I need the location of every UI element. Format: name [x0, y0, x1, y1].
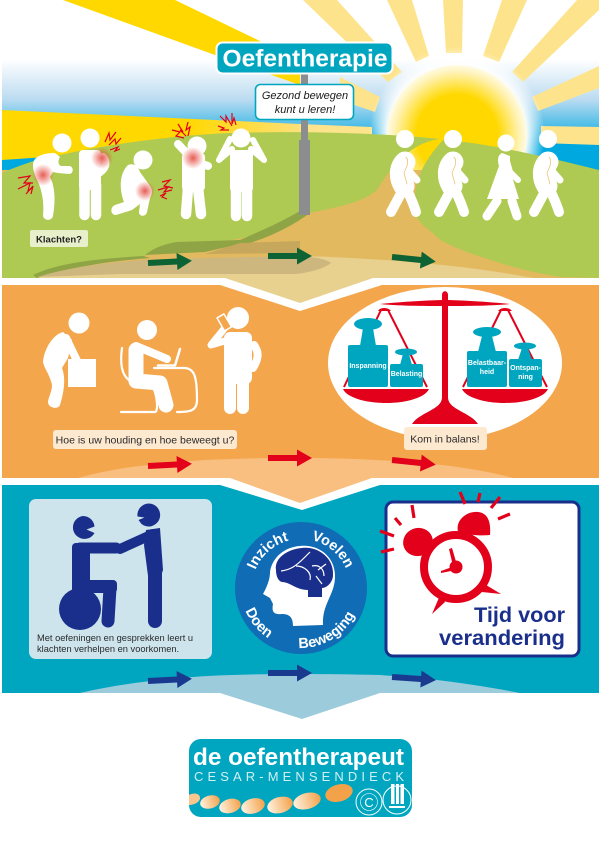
- figures with complaints: [18, 113, 264, 220]
- walking figures: [391, 130, 560, 216]
- walker 2: [439, 130, 465, 212]
- pale ground: [33, 257, 533, 278]
- heading: verandering: [439, 627, 565, 650]
- arrows: green: [148, 248, 437, 271]
- weight: Belastbaarheid: Belastbaar-: [468, 360, 507, 367]
- logo ovals: [189, 781, 355, 816]
- sign text: kunt u leren!: [275, 104, 335, 116]
- figure: lifting a box: [43, 312, 96, 408]
- large yellow ray top left: [63, 0, 300, 85]
- road base: [2, 170, 599, 278]
- caption: klachten verhelpen en voorkomen.: [37, 644, 179, 654]
- caption: balance: [404, 427, 487, 450]
- figure: sitting at a laptop: [121, 320, 197, 412]
- left hill: [2, 132, 440, 278]
- head silhouette: [263, 546, 335, 626]
- figure: shoulder pain: [79, 128, 113, 215]
- caption: Met oefeningen en gesprekken leert u: [37, 633, 193, 643]
- arrows: blue: [148, 664, 436, 689]
- title: Oefentherapie: [222, 46, 388, 72]
- sun: [369, 47, 545, 223]
- panel: exercises and talks: [29, 499, 212, 659]
- walker 4: [534, 130, 560, 212]
- panel: time for change: [380, 492, 579, 656]
- figure: chest pain: [178, 136, 208, 214]
- yellow band left: [2, 110, 300, 160]
- weight: Inspanning: Inspanning: [349, 363, 387, 370]
- figure: on the phone: [211, 307, 258, 408]
- panel: section 2 orange: [2, 285, 599, 478]
- alarm clock: [380, 492, 510, 614]
- circle: head with brain: [235, 522, 367, 654]
- weight: Ontspanning: [509, 342, 542, 387]
- weight: Inspanning: [348, 318, 388, 387]
- caption: balance: Kom in balans!: [410, 434, 480, 446]
- balance illustration: [328, 287, 562, 439]
- brain: [276, 548, 333, 597]
- logo: CESAR-MENSENDIECK: [194, 769, 404, 784]
- seal: C: C: [364, 795, 374, 810]
- circular words: Voelen: [314, 530, 352, 568]
- figure: seated on ball: [59, 516, 117, 630]
- weight: Belastbaarheid: [467, 327, 507, 387]
- walker 3: woman in dress: [487, 134, 519, 216]
- walker 1: [391, 130, 417, 212]
- sign text: Gezond bewegen: [262, 90, 348, 102]
- weight: Ontspanning: ning: [518, 374, 533, 381]
- weight: Belasting: [390, 348, 423, 387]
- seal: M: [383, 784, 411, 814]
- figure: head pain: [219, 128, 264, 216]
- panel: section 3 teal: [2, 478, 599, 719]
- shadows on ground: [33, 211, 331, 278]
- label: klachten: [30, 230, 88, 247]
- scale stand and beam: [343, 291, 548, 424]
- weight: Belasting: Belasting: [391, 371, 422, 378]
- figure: therapist: [120, 503, 163, 621]
- signpost: [299, 73, 310, 215]
- heading: Tijd voor: [474, 604, 565, 627]
- weight: Belastbaarheid: heid: [480, 369, 494, 376]
- figure: back pain: [32, 134, 73, 220]
- caption: [37, 633, 193, 654]
- right hill: [415, 140, 599, 278]
- heading: [439, 604, 565, 650]
- circular words: Doen: [246, 607, 272, 638]
- caption: posture question: Hoe is uw houding en hoe beweegt u?: [56, 434, 234, 446]
- chevron of section 1: [225, 278, 373, 303]
- logo: [189, 739, 412, 817]
- circular words: Beweging: [299, 612, 356, 648]
- figure: kneeling with knee pain: [111, 150, 155, 216]
- label: klachten: Klachten?: [36, 234, 82, 246]
- arrows: red: [148, 450, 437, 474]
- circular words: [246, 530, 356, 648]
- logo: de oefentherapeut: [193, 744, 404, 771]
- sign text: [256, 84, 354, 120]
- lightning marks: [18, 113, 236, 199]
- circular words: Inzicht: [246, 532, 288, 569]
- caption: posture question: [53, 430, 237, 449]
- panel: sky and landscape: [2, 0, 599, 278]
- pale sun rays: [300, 0, 599, 145]
- seal: C: [356, 789, 382, 815]
- weight: Ontspanning: Ontspan-: [510, 365, 542, 372]
